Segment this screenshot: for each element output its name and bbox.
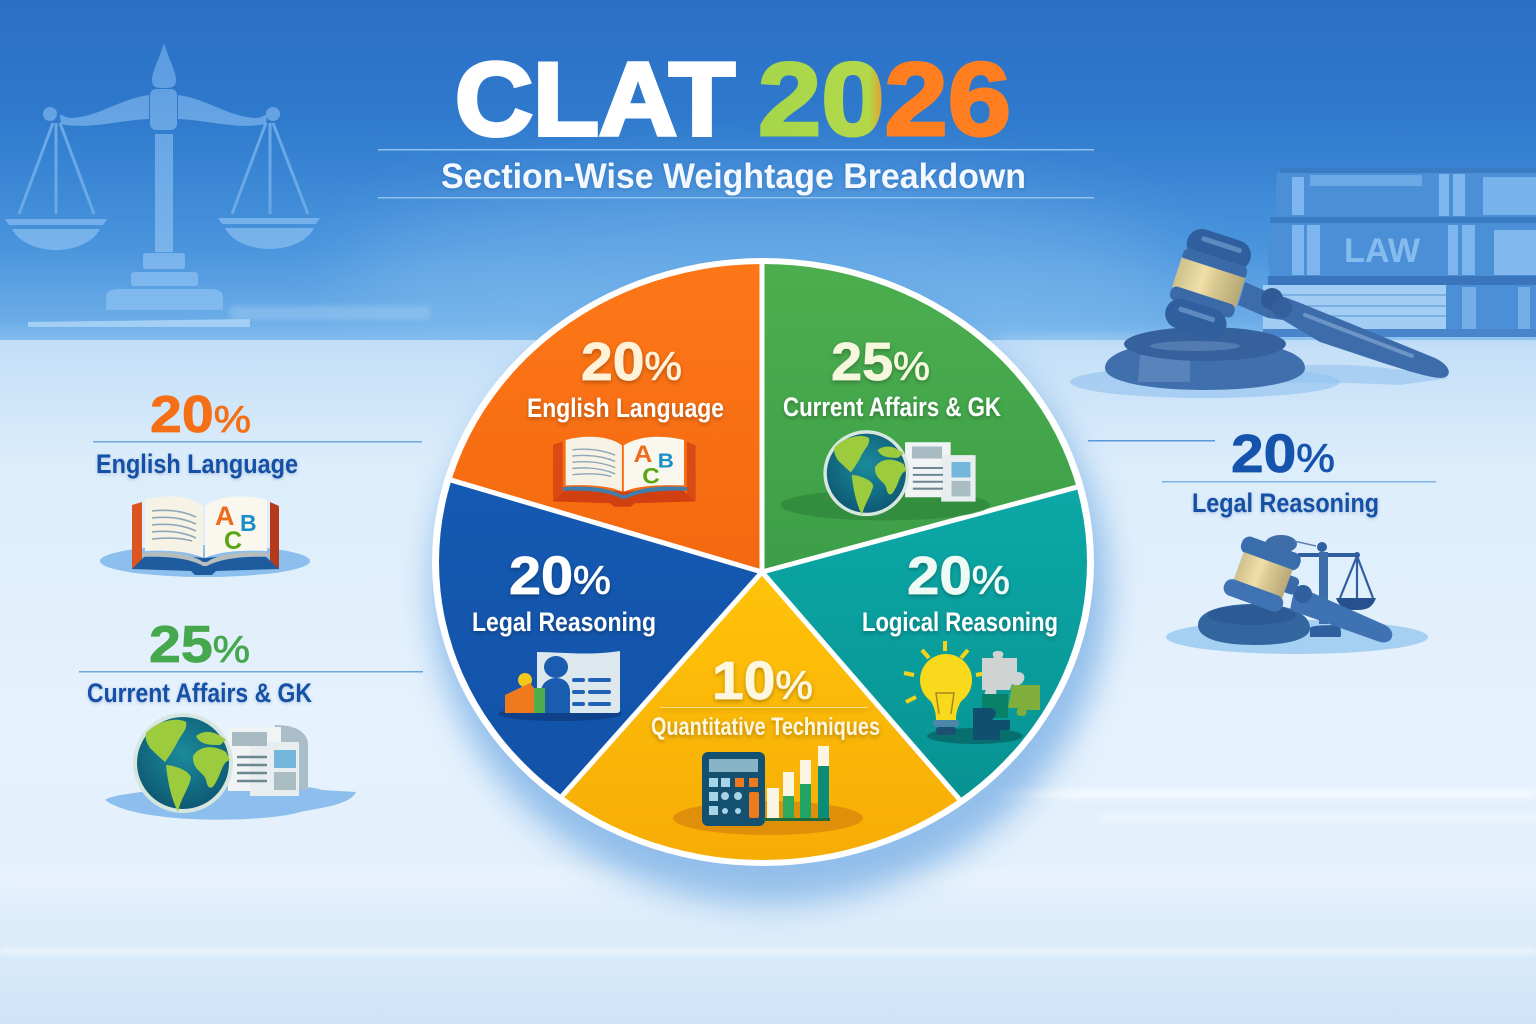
slice: Logical Reasoning [766, 487, 1087, 799]
pie label: Logical Reasoning: Logical Reasoning [862, 607, 1058, 637]
label: Legal Reasoning [1192, 488, 1379, 518]
outer ring [432, 258, 1094, 866]
label: English Language [96, 449, 298, 479]
pie label: Current Affairs & GK: Current Affairs & GK [783, 392, 1001, 422]
icon: open book: B [240, 510, 257, 536]
slice: Legal Reasoning [439, 480, 758, 796]
top book [1276, 168, 1536, 218]
pie icon: open book: A [634, 441, 652, 468]
pie icon: open book: C [642, 464, 660, 488]
subtitle with rules: Section-Wise Weightage Breakdown [441, 157, 1026, 196]
watermark: law books [1263, 168, 1536, 337]
pie label: Logical Reasoning: 20% [907, 546, 1010, 606]
title: CLAT 2026: 2026 [758, 42, 1011, 158]
watermark: scales of justice [5, 43, 320, 327]
pie label: Legal Reasoning: 20% [509, 546, 611, 606]
title: CLAT 2026 [455, 42, 1011, 158]
pie label: Current Affairs & GK: 25% [831, 332, 930, 392]
pie label: Quantitative Techniques [651, 651, 880, 741]
pie icon: calculator and bar chart [673, 746, 863, 835]
pie label: Quantitative Techniques: Quantitative Techniques [651, 713, 880, 741]
pie chart [432, 258, 1094, 866]
pie icon: light bulb and puzzle [904, 641, 1040, 744]
side callout: Current Affairs & GK [79, 616, 423, 820]
icon: globe and newspapers [105, 713, 356, 820]
icon: open book: A [215, 501, 234, 531]
percentage: 25% [149, 616, 250, 674]
pie label: Current Affairs & GK [783, 332, 1001, 422]
slice: English Language [452, 264, 762, 569]
pie icon: open book [553, 437, 696, 507]
pie label: English Language: English Language [527, 393, 724, 423]
pie icon: globe and newspapers [780, 430, 990, 520]
pie label: Legal Reasoning: Legal Reasoning [472, 607, 656, 637]
middle book with LAW [1268, 217, 1536, 276]
middle book with LAW: LAW [1344, 232, 1421, 270]
bottom book [1263, 276, 1536, 337]
slice: Current Affairs & GK [764, 264, 1076, 569]
slice: Quantitative Techniques [562, 576, 960, 860]
pie icon: legal document [498, 651, 622, 721]
pie icon: open book: B [658, 449, 674, 472]
pie shadow [432, 280, 1108, 904]
side callout: Legal Reasoning [1088, 424, 1436, 654]
icon: open book [100, 496, 310, 577]
pie label: English Language: 20% [581, 332, 682, 392]
side callout: English Language [93, 386, 422, 577]
icon: gavel and scales [1166, 534, 1428, 654]
pie label: Legal Reasoning [472, 546, 656, 637]
pie label: Quantitative Techniques: 10% [712, 651, 813, 711]
percentage: 20% [150, 386, 251, 444]
pie label: English Language [527, 332, 724, 423]
title: CLAT 2026: CLAT [455, 42, 735, 158]
label: Current Affairs & GK [87, 678, 312, 708]
pie label: Logical Reasoning [862, 546, 1058, 637]
icon: open book: C [224, 527, 242, 555]
icon: large gavel [1070, 225, 1450, 398]
percentage: 20% [1231, 424, 1335, 484]
